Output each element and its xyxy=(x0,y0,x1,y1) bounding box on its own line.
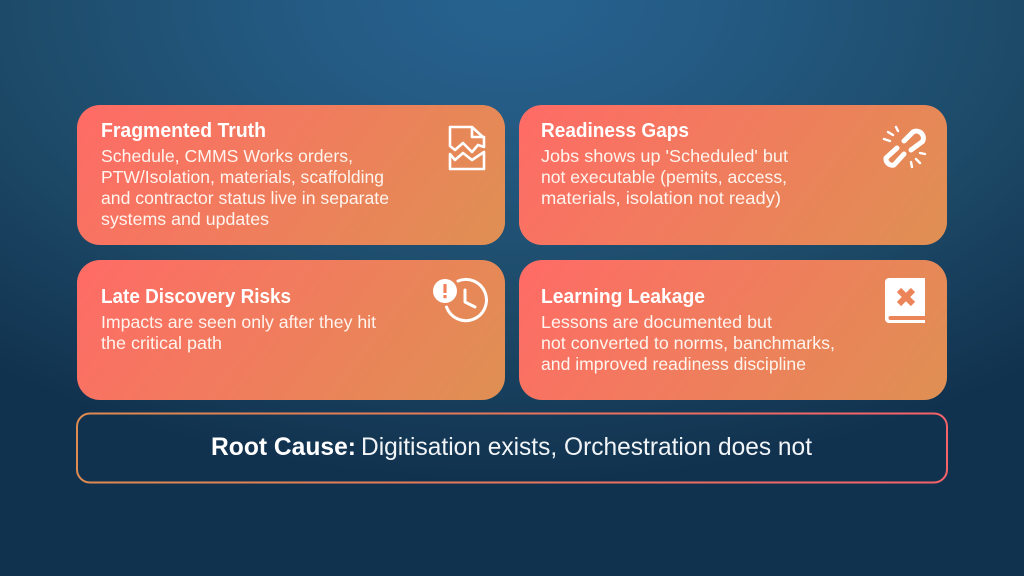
panel: fragmented truth xyxy=(77,105,505,245)
text block: learning leakage: Lessons are documented but xyxy=(541,312,772,332)
panel: late discovery risks xyxy=(77,260,505,400)
text block: fragmented truth: systems and updates xyxy=(101,209,269,229)
text block: learning leakage xyxy=(541,312,835,374)
heading: learning leakage: Learning Leakage xyxy=(541,286,705,308)
text block: readiness gaps: not executable (pemits, access, xyxy=(541,167,787,187)
root cause statement: Digitisation exists, Orchestration does not xyxy=(361,433,812,461)
text block: fragmented truth: and contractor status live in separate xyxy=(101,188,389,208)
text block: learning leakage: not converted to norms, banchmarks, xyxy=(541,333,835,353)
text block: fragmented truth: PTW/Isolation, materials, scaffolding xyxy=(101,167,384,187)
text block: late discovery risks xyxy=(101,312,376,353)
icon: book with cross xyxy=(885,278,926,323)
text block: late discovery risks: the critical path xyxy=(101,333,222,353)
text block: late discovery risks: Impacts are seen only after they hit xyxy=(101,312,376,332)
text block: learning leakage: and improved readiness discipline xyxy=(541,354,806,374)
text block: readiness gaps: materials, isolation not ready) xyxy=(541,188,781,208)
icon: clock with alert xyxy=(433,279,486,321)
heading: late discovery risks: Late Discovery Risks xyxy=(101,286,291,308)
callout: root cause xyxy=(77,414,947,482)
icon: torn document xyxy=(450,127,484,169)
panel: learning leakage xyxy=(519,260,947,400)
heading: readiness gaps: Readiness Gaps xyxy=(541,120,689,142)
panel: readiness gaps xyxy=(519,105,947,245)
root cause statement: Root Cause: xyxy=(211,433,356,461)
text block: fragmented truth: Schedule, CMMS Works orders, xyxy=(101,146,353,166)
text block: readiness gaps xyxy=(541,146,788,208)
icon: broken link xyxy=(884,127,925,167)
heading: fragmented truth: Fragmented Truth xyxy=(101,120,266,142)
text block: readiness gaps: Jobs shows up 'Scheduled' but xyxy=(541,146,788,166)
text block: fragmented truth xyxy=(101,146,389,229)
